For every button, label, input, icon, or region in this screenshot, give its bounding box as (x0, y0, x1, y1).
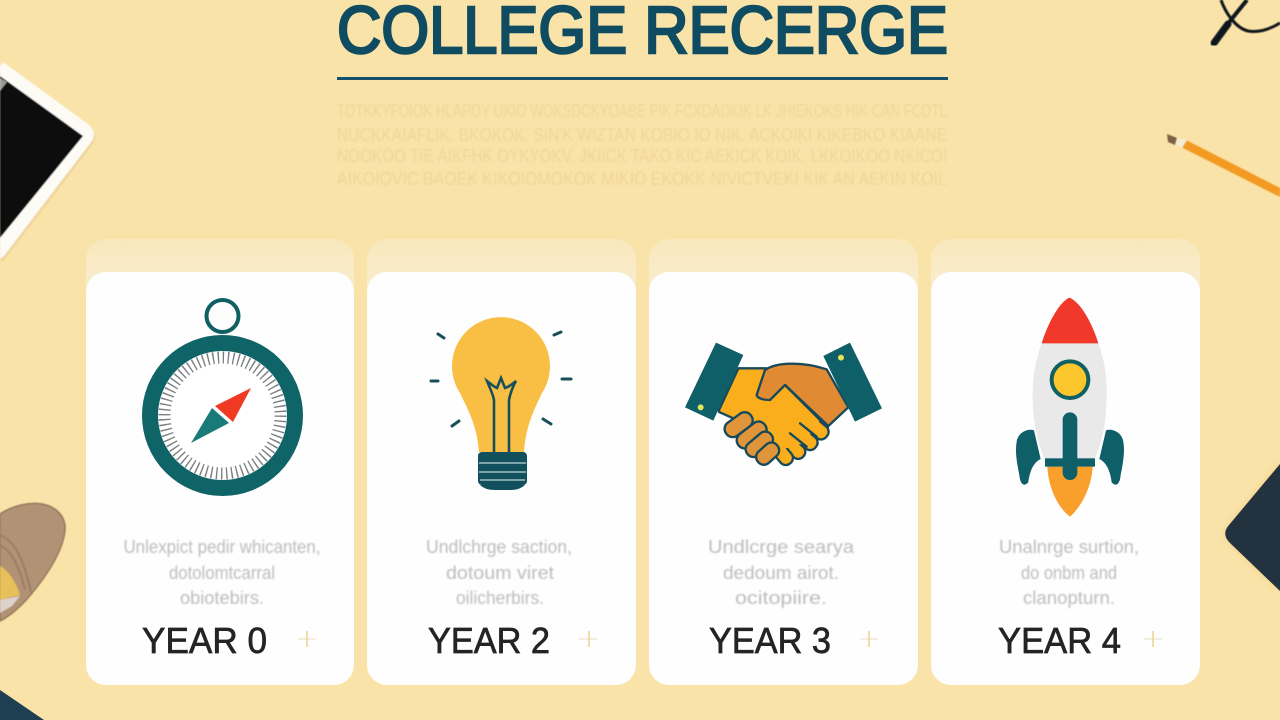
desk prop: glasses top right (1214, 0, 1280, 43)
card tab (649, 239, 918, 309)
intro text block: TOTKKYFOIOK HLAPOY UKIO WOKSDCKYOABE PIK FCXDADKIK LK JHIEKOKS HIK CAN FCDTL (337, 101, 947, 121)
icon: small marker (579, 631, 597, 647)
desk prop: dark object bottom left (0, 690, 44, 720)
intro text block: AIKOIOVIC BAOEK KIKOIOMOKOK MIKIO EKOKK NIVICTVEKI KIK AN AEKIN KOIL (337, 169, 947, 189)
description (999, 537, 1139, 608)
icon: rocket (1016, 298, 1124, 517)
description: dedoum airot. (723, 563, 839, 583)
icon: light bulb (431, 317, 571, 490)
card 3: year 3 (649, 239, 918, 685)
card body (367, 272, 636, 685)
year label: YEAR 0 (142, 620, 267, 661)
description: Undlcrge searya (708, 537, 855, 557)
description: dotoum viret (446, 563, 554, 583)
desk prop: tablet top left (0, 62, 95, 262)
description (124, 537, 320, 608)
card 2: year 2 (367, 239, 636, 685)
description: do onbm and (1021, 563, 1117, 583)
intro text block: NOOKOO TIE AIKFHK OYKYOKV. JKIICK TAKO KIC AEKICK KOIK. LKKOIKOO NKICOI (337, 146, 947, 166)
desk prop: tablet bottom right (1224, 462, 1280, 592)
card 1: year 0 (86, 239, 354, 685)
intro text block (337, 101, 947, 189)
card tab (86, 239, 354, 309)
intro text block: NUCKKAIAFLIK. BKOKOK. SIN'K WIZTAN KOBIO IO NIK. ACKOIKI KIKEBKO KIAANE (337, 125, 947, 145)
description: dotolomtcarral (169, 563, 275, 583)
description: clanopturn. (1023, 588, 1115, 608)
icon: small marker (298, 631, 316, 647)
card tab (367, 239, 636, 309)
description: Unlexpict pedir whicanten, (124, 537, 320, 557)
year label: YEAR 2 (428, 620, 550, 661)
card body (931, 272, 1200, 685)
icon: compass (150, 300, 295, 488)
description (708, 537, 855, 608)
year label: YEAR 4 (998, 620, 1121, 661)
card body (649, 272, 918, 685)
icon: handshake (685, 343, 882, 468)
title underline (337, 77, 948, 80)
card 4: year 4 (931, 239, 1200, 685)
desk prop: shoe (0, 503, 65, 621)
description: Undlchrge saction, (426, 537, 572, 557)
year label: YEAR 3 (709, 620, 831, 661)
card body (86, 272, 354, 685)
description: ocitopiire. (735, 588, 827, 608)
description: obiotebirs. (180, 588, 264, 608)
card tab (931, 239, 1200, 309)
description: oilicherbirs. (456, 588, 544, 608)
icon: small marker (860, 631, 878, 647)
description (426, 537, 572, 608)
description: Unalnrge surtion, (999, 537, 1139, 557)
icon: small marker (1144, 631, 1162, 647)
desk prop: pencil (1167, 134, 1280, 197)
